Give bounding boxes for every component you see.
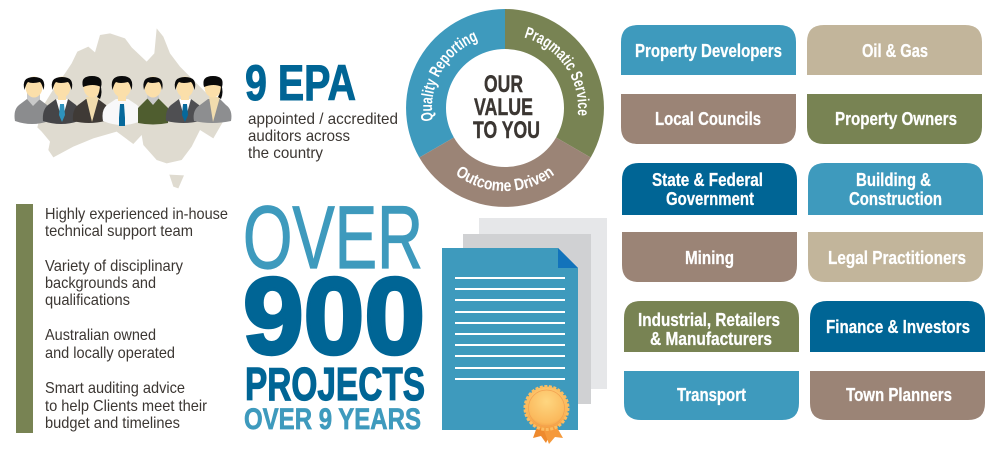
- tag: town planners: Town Planners: [846, 385, 952, 405]
- centre text: TO YOU: [473, 117, 540, 144]
- tag: property developers: [621, 25, 796, 75]
- centre text: VALUE: [474, 94, 533, 121]
- text block: auditors: [248, 111, 398, 162]
- tag: state and federal government: State & Federal: [652, 170, 763, 190]
- text block: strengths list: Highly experienced in-house: [45, 206, 228, 223]
- text block: strengths list: qualifications: [45, 292, 130, 309]
- headline: over 900 projects: [243, 187, 425, 436]
- headline: over 900 projects: 900: [243, 256, 425, 378]
- team figure 6: [166, 76, 202, 123]
- text block: strengths list: technical support team: [45, 223, 193, 240]
- accent bar: [16, 204, 33, 433]
- centre text: OUR: [484, 71, 523, 98]
- text block: auditors: appointed / accredited: [248, 111, 398, 128]
- tag: industrial, retailers and manufacturers: & Manufacturers: [650, 329, 772, 349]
- team figure 1: [14, 76, 50, 124]
- headline: over 900 projects: OVER: [243, 187, 423, 287]
- tag: industrial, retailers and manufacturers: [624, 301, 799, 352]
- team figure 5: [138, 76, 168, 124]
- map: Australia: [37, 28, 224, 188]
- tag: building and construction: Building &: [856, 170, 931, 190]
- text block: strengths list: Australian owned: [45, 327, 156, 344]
- tag: legal practitioners: Legal Practitioners: [828, 248, 966, 268]
- tag: property developers: Property Developers: [635, 41, 782, 61]
- text block: auditors: auditors across: [248, 128, 350, 145]
- label: pragmatic service: Pragmatic Service: [524, 26, 590, 116]
- headline: over 900 projects: PROJECTS: [245, 358, 425, 410]
- tag: transport: [624, 371, 799, 420]
- panel: sector tags: [621, 25, 985, 420]
- tag: state and federal government: [622, 163, 797, 215]
- team figure 2: [43, 76, 80, 124]
- tag: finance and investors: [810, 301, 985, 352]
- tag: property owners: Property Owners: [835, 109, 957, 129]
- text block: strengths list: [45, 206, 228, 432]
- centre text: [473, 71, 540, 144]
- text block: auditors: the country: [248, 145, 323, 162]
- heading: 9 EPA: 9 EPA: [245, 55, 356, 111]
- tag: town planners: [810, 371, 985, 420]
- team figure 7: [194, 76, 231, 123]
- tag: building and construction: Construction: [849, 189, 942, 209]
- tag: local councils: [621, 94, 796, 144]
- tag: legal practitioners: [808, 232, 983, 282]
- donut chart: our value to you: [406, 9, 604, 207]
- text block: strengths list: backgrounds and: [45, 275, 156, 292]
- label: quality reporting: Quality Reporting: [421, 32, 478, 121]
- label: outcome driven: Outcome Driven: [457, 166, 554, 192]
- text block: strengths list: Smart auditing advice: [45, 380, 185, 397]
- icon: seal: [525, 386, 568, 444]
- tag: industrial, retailers and manufacturers: Industrial, Retailers: [638, 310, 780, 330]
- segment: pragmatic service: [505, 9, 604, 158]
- tag: local councils: Local Councils: [655, 109, 761, 129]
- text block: strengths list: to help Clients meet their: [45, 398, 208, 415]
- tag: mining: [622, 232, 797, 282]
- headline: over 900 projects: OVER 9 YEARS: [244, 403, 421, 436]
- team figure 3: [73, 76, 108, 123]
- tag: property owners: [807, 94, 982, 144]
- text block: strengths list: and locally operated: [45, 345, 175, 362]
- icon: document stack with seal: [442, 218, 607, 444]
- tag: mining: Mining: [685, 248, 734, 268]
- text block: strengths list: budget and timelines: [45, 415, 180, 432]
- tag: oil and gas: [807, 25, 982, 75]
- tag: finance and investors: Finance & Investors: [826, 317, 970, 337]
- tag: oil and gas: Oil & Gas: [862, 41, 928, 61]
- segment: quality reporting: [406, 9, 505, 158]
- segment: outcome driven: [419, 138, 591, 207]
- tag: building and construction: [808, 163, 983, 215]
- tag: transport: Transport: [677, 385, 746, 405]
- tag: state and federal government: Government: [666, 189, 754, 209]
- map of Australia with team: [14, 28, 231, 188]
- team figure 4: central: [102, 76, 142, 126]
- text block: strengths list: Variety of disciplinary: [45, 258, 183, 275]
